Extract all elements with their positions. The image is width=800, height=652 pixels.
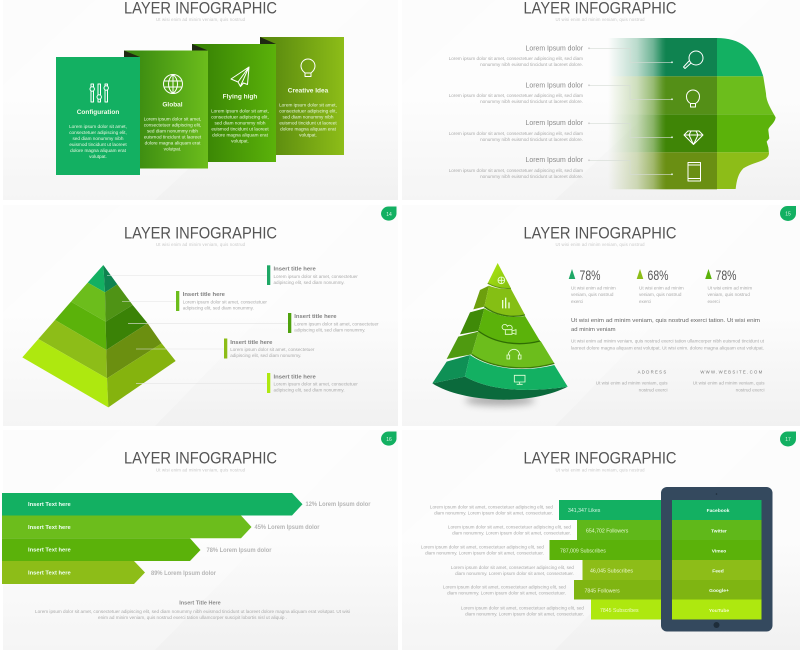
bar: subscribes: 787,009 Subscribes xyxy=(560,548,606,554)
bar: google: 7845 Followers xyxy=(584,588,620,594)
card text: sed diam nonummy nibh xyxy=(147,128,198,134)
icon: paper plane xyxy=(231,67,249,86)
stat 2: 68% xyxy=(648,268,668,283)
icons xyxy=(498,277,525,384)
title: LAYER INFOGRAPHIC xyxy=(524,224,676,242)
arrow 3 xyxy=(2,538,272,561)
icon: light bulb xyxy=(301,59,315,76)
main statement: Ut wisi enim ad minim veniam, quis nostrud exerci tation ullamcorper nibh euismod tincidunt ut xyxy=(571,338,765,344)
card: global xyxy=(124,50,208,168)
row 4: nonummy nibh euismod tincidunt ut laoreet dolore. xyxy=(480,174,583,179)
stat 2: Ut wisi enim ad minim xyxy=(639,286,684,290)
icon: diamond xyxy=(684,131,703,144)
callout 5: Insert title here xyxy=(274,374,316,380)
stat 3: Ut wisi enim ad minim xyxy=(708,286,752,290)
icon: light bulb xyxy=(686,90,700,107)
row descriptions: Lorem ipsum dolor sit amet, consectetuer adipiscing elit, sed xyxy=(461,606,584,610)
stats xyxy=(569,268,752,304)
fading dark bands xyxy=(608,38,717,189)
arrow 2 xyxy=(2,516,320,538)
slide 3 panel: pyramid xyxy=(3,205,398,426)
icon: globe xyxy=(498,277,505,284)
bar: likes: 341,347 Likes xyxy=(568,508,601,514)
page badge: 17 xyxy=(785,437,791,443)
page badge xyxy=(780,432,796,447)
callout 2: adipiscing elit, sed diam nonummy. xyxy=(183,306,254,310)
row descriptions: diam nonummy. Lorem ipsum dolor sit amet, consectetuer. xyxy=(425,550,544,556)
footer text: Insert Title Here xyxy=(179,600,221,606)
card text: euismod tincidunt ut laoreet xyxy=(279,120,337,126)
card text: Lorem ipsum dolor sit amet, xyxy=(144,116,201,122)
subtitle: Ut wisi enim ad minim veniam, quis nostrud xyxy=(556,242,645,247)
icon: headphones xyxy=(507,349,521,359)
row 3 xyxy=(449,120,703,144)
callout 2 xyxy=(122,291,267,311)
row 3: Lorem Ipsum dolor xyxy=(526,120,584,127)
card text: volutpat. xyxy=(89,154,107,159)
stat 3: 78% xyxy=(716,268,736,283)
callout 4: Insert title here xyxy=(230,340,273,346)
icon: bars xyxy=(503,298,509,308)
row descriptions: Lorem ipsum dolor sit amet, consectetuer adipiscing elit, sed xyxy=(443,585,566,590)
row 2: Lorem Ipsum dolor xyxy=(526,82,584,90)
tablet screen rows: YouTube xyxy=(709,608,729,614)
stat 3: veniam, quis nostrud xyxy=(708,292,750,297)
subtitle: Ut wisi enim ad minim veniam, quis nostrud xyxy=(556,17,645,22)
card heading: Configuration xyxy=(77,109,119,116)
panel background xyxy=(402,0,800,200)
row descriptions: diam nonummy. Lorem ipsum dolor sit amet, consectetuer. xyxy=(434,510,553,516)
card text xyxy=(211,108,269,144)
page badge xyxy=(381,432,396,446)
row 4: Lorem Ipsum dolor xyxy=(526,157,584,164)
icon: slider knobs xyxy=(90,86,108,99)
card text: Lorem ipsum dolor sit amet, xyxy=(69,124,127,129)
row 2: nonummy nibh euismod tincidunt ut laoreet dolore. xyxy=(480,99,583,104)
bar: followers: 654,702 Followers xyxy=(586,528,629,534)
footer text: enim ad minim veniam, quis nostrud exerci tation ullamcorper suscipit lobortis nisl ut aliquip . xyxy=(98,615,287,620)
row 1: Lorem Ipsum dolor xyxy=(526,46,584,52)
icon: video camera xyxy=(502,324,516,334)
card text: dolore magna aliquam erat xyxy=(145,140,201,146)
callout 3 xyxy=(128,313,379,333)
stat 3: exerci xyxy=(708,299,720,304)
website block: WWW.WEBSITE.COM xyxy=(700,370,764,374)
callout 1 xyxy=(107,265,358,285)
row 3: nonummy nibh euismod tincidunt ut laoreet dolore. xyxy=(480,137,583,142)
address block: nostrud exerci xyxy=(639,388,668,392)
page badge: 14 xyxy=(386,212,392,218)
stat 2: veniam, quis nostrud xyxy=(639,292,682,297)
layer 3 xyxy=(460,308,484,334)
main statement: Ut wisi enim ad minim veniam, quis nostrud exerci tation. Ut wisi enim xyxy=(571,318,760,324)
panel background xyxy=(402,430,800,650)
card text: euismod tincidunt ut laoreet xyxy=(69,142,127,147)
row descriptions: Lorem ipsum dolor sit amet, consectetuer adipiscing elit, sed xyxy=(448,524,571,529)
card text: dolore magna aliquam erat xyxy=(280,126,337,132)
tablet screen rows: Feed xyxy=(712,568,724,574)
arrow 2: Insert Text here xyxy=(28,525,72,531)
cone pyramid xyxy=(432,263,568,406)
icon: tablet xyxy=(688,162,700,181)
card text: Lorem ipsum dolor sit amet, xyxy=(211,108,269,114)
layer 1 xyxy=(488,263,511,288)
head silhouette xyxy=(717,38,776,189)
icon: sliders xyxy=(91,84,108,102)
tablet xyxy=(661,487,772,632)
subtitle: Ut wisi enim ad minim veniam, quis nostrud xyxy=(156,468,246,472)
card heading: Global xyxy=(162,102,183,108)
slide 6 panel: tablet xyxy=(402,430,800,650)
card heading: Creative Idea xyxy=(288,88,329,94)
page badge: 15 xyxy=(785,211,791,217)
arrow 4: 89% Lorem Ipsum dolor xyxy=(151,570,217,577)
row descriptions: diam nonummy. Lorem ipsum dolor sit amet, consectetuer. xyxy=(465,612,584,616)
base xyxy=(432,377,568,400)
card text: euismod tincidunt ut laoreet xyxy=(144,134,202,140)
arrow 4 xyxy=(2,561,217,584)
callout 1: adipiscing elit, sed diam nonummy. xyxy=(274,280,345,285)
connector xyxy=(589,123,672,137)
card text: sed diam nonummy nibh xyxy=(282,114,334,120)
stat 2: exerci xyxy=(639,299,651,304)
website block: nostrud exerci xyxy=(736,388,764,392)
slide 5 panel: arrow bars xyxy=(2,430,398,650)
layer 5 xyxy=(432,355,470,383)
page badge: 16 xyxy=(386,437,392,443)
card text: Lorem ipsum dolor sit amet, xyxy=(279,102,337,108)
connector xyxy=(589,85,672,99)
main statement: ad minim veniam xyxy=(571,327,616,333)
subtitle: Ut wisi enim ad minim veniam, quis nostrud xyxy=(556,468,645,472)
tablet screen rows: Google+ xyxy=(709,588,729,594)
callout 1: Insert title here xyxy=(274,266,316,272)
callout 4: adipiscing elit, sed diam nonummy. xyxy=(230,353,301,358)
layer 2 xyxy=(473,286,489,309)
main statement: laoreet dolore magna aliquam erat volutpat. Ut wisi enim. dolore magna aliquam erat volutpat. xyxy=(571,346,764,350)
stat 2 xyxy=(637,268,684,304)
slide 4 panel: curved cone pyramid xyxy=(402,205,800,426)
title: LAYER INFOGRAPHIC xyxy=(124,224,277,242)
panel background xyxy=(3,0,398,200)
card text: sed diam nonummy nibh xyxy=(72,136,124,141)
row descriptions: diam nonummy. Lorem ipsum dolor sit amet, consectetuer. xyxy=(447,591,566,596)
arrow 2: 45% Lorem Ipsum dolor xyxy=(254,524,320,531)
callout 3: adipiscing elit, sed diam nonummy. xyxy=(294,328,365,333)
row 4 xyxy=(449,157,700,181)
footer text: Lorem ipsum dolor sit amet, consectetuer adipiscing elit, sed diam nonummy nibh euismod tincidunt ut laoreet dolore magna aliquam erat volutpat. Ut wisi xyxy=(35,609,350,614)
card heading: Flying high xyxy=(223,94,257,100)
callout 2: Lorem ipsum dolor sit amet, consectetuer xyxy=(183,300,267,304)
arrow 4: Insert Text here xyxy=(28,570,72,576)
icon: globe xyxy=(164,74,182,94)
card text xyxy=(69,124,127,159)
row 1: Lorem ipsum dolor sit amet, consectetuer adipiscing elit, sed diam xyxy=(449,56,583,61)
subtitle: Ut wisi enim ad minim veniam, quis nostrud xyxy=(156,242,246,247)
card text: consectetuer adipiscing elit, xyxy=(144,122,201,128)
address block: ADDRESS xyxy=(638,370,668,374)
card text: consectetuer adipiscing elit, xyxy=(69,130,127,135)
address block: Ut wisi enim ad minim veniam, quis xyxy=(596,380,668,386)
callout 4 xyxy=(136,338,315,358)
shadow xyxy=(465,395,535,406)
callout 5: adipiscing elit, sed diam nonummy. xyxy=(274,388,345,392)
row 1: nonummy nibh euismod tincidunt ut laoreet dolore. xyxy=(480,62,583,67)
row descriptions: Lorem ipsum dolor sit amet, consectetuer adipiscing elit, sed xyxy=(451,565,574,570)
page badge xyxy=(381,206,396,221)
arrow 1: Insert Text here xyxy=(28,502,72,508)
card text: volutpat. xyxy=(164,146,181,152)
tablet screen rows xyxy=(672,500,762,620)
row descriptions: Lorem ipsum dolor sit amet, consectetuer adipiscing elit, sed xyxy=(430,504,553,510)
card text xyxy=(279,102,337,138)
tablet screen rows: Twitter xyxy=(711,528,727,534)
row descriptions: Lorem ipsum dolor sit amet, consectetuer adipiscing elit, sed xyxy=(421,544,544,550)
layer 4 xyxy=(447,332,478,359)
card text: euismod tincidunt ut laoreet xyxy=(211,126,269,132)
website block: Ut wisi enim ad minim veniam, quis xyxy=(693,380,765,386)
card text: sed diam nonummy nibh xyxy=(214,120,266,126)
page badge xyxy=(780,206,796,221)
stat 1: Ut wisi enim ad minim xyxy=(571,286,616,290)
arrow 1 xyxy=(2,493,371,516)
arrow 3: 78% Lorem Ipsum dolor xyxy=(206,547,272,554)
address block xyxy=(596,370,668,392)
card text: volutpat. xyxy=(299,132,317,138)
stat 1 xyxy=(569,268,616,304)
panel background xyxy=(402,205,800,426)
callout 3: Lorem ipsum dolor sit amet, consectetuer xyxy=(294,322,379,327)
card text: dolore magna aliquam erat xyxy=(70,148,127,153)
bar: feed: 46,045 Subscribes xyxy=(590,568,633,574)
card: creative idea xyxy=(260,37,344,155)
row descriptions xyxy=(421,504,584,616)
slide 2 panel: head profile xyxy=(402,0,800,200)
stat bars xyxy=(550,500,661,620)
tablet screen rows: Facebook xyxy=(707,508,730,514)
row 2: Lorem ipsum dolor sit amet, consectetuer adipiscing elit, sed diam xyxy=(449,93,583,98)
subtitle: Ut wisi enim ad minim veniam, quis nostrud xyxy=(156,17,246,22)
callout 5: Lorem ipsum dolor sit amet, consectetuer xyxy=(274,382,358,386)
icon: magnifier xyxy=(684,51,703,68)
card: configuration xyxy=(56,57,140,175)
card: flying high xyxy=(192,44,276,162)
row descriptions: diam nonummy. Lorem ipsum dolor sit amet, consectetuer. xyxy=(452,530,571,535)
slide 1 panel: folded cards xyxy=(3,0,398,200)
row 3: Lorem ipsum dolor sit amet, consectetuer adipiscing elit, sed diam xyxy=(449,131,583,136)
card text: dolore magna aliquam erat xyxy=(212,132,269,138)
bar: youtube: 7845 Subscribes xyxy=(600,608,639,614)
row 4: Lorem ipsum dolor sit amet, consectetuer adipiscing elit, sed diam xyxy=(449,168,583,173)
callout 1: Lorem ipsum dolor sit amet, consectetuer xyxy=(274,274,358,279)
panel background xyxy=(3,205,398,426)
connector xyxy=(589,48,672,62)
pyramid xyxy=(22,265,176,407)
callout 4: Lorem ipsum dolor sit amet, consectetuer xyxy=(230,347,315,352)
stat 1: exerci xyxy=(571,299,583,304)
callout 5 xyxy=(136,373,358,393)
website block xyxy=(693,370,765,392)
connector xyxy=(589,160,672,174)
title: LAYER INFOGRAPHIC xyxy=(524,448,676,468)
tablet screen rows: Vimeo xyxy=(712,548,726,554)
card text: volutpat. xyxy=(231,138,249,144)
card text: consectetuer adipiscing elit, xyxy=(279,108,337,114)
stat 1: veniam, quis nostrud xyxy=(571,292,614,297)
arrow 1: 12% Lorem Ipsum dolor xyxy=(306,501,371,508)
arrow 3: Insert Text here xyxy=(28,548,72,554)
main statement xyxy=(571,318,765,350)
title: LAYER INFOGRAPHIC xyxy=(124,448,277,468)
callout 3: Insert title here xyxy=(294,314,337,320)
row descriptions: diam nonummy. Lorem ipsum dolor sit amet, consectetuer. xyxy=(455,571,574,576)
row 1 xyxy=(449,46,703,68)
footer text xyxy=(35,600,350,620)
panel background xyxy=(3,430,398,650)
row 2 xyxy=(449,82,700,107)
card text: consectetuer adipiscing elit, xyxy=(211,114,269,120)
stat 3 xyxy=(705,268,752,304)
card text xyxy=(144,116,202,152)
icon: monitor xyxy=(514,375,525,384)
callout 2: Insert title here xyxy=(183,292,226,298)
stat 1: 78% xyxy=(580,268,600,283)
